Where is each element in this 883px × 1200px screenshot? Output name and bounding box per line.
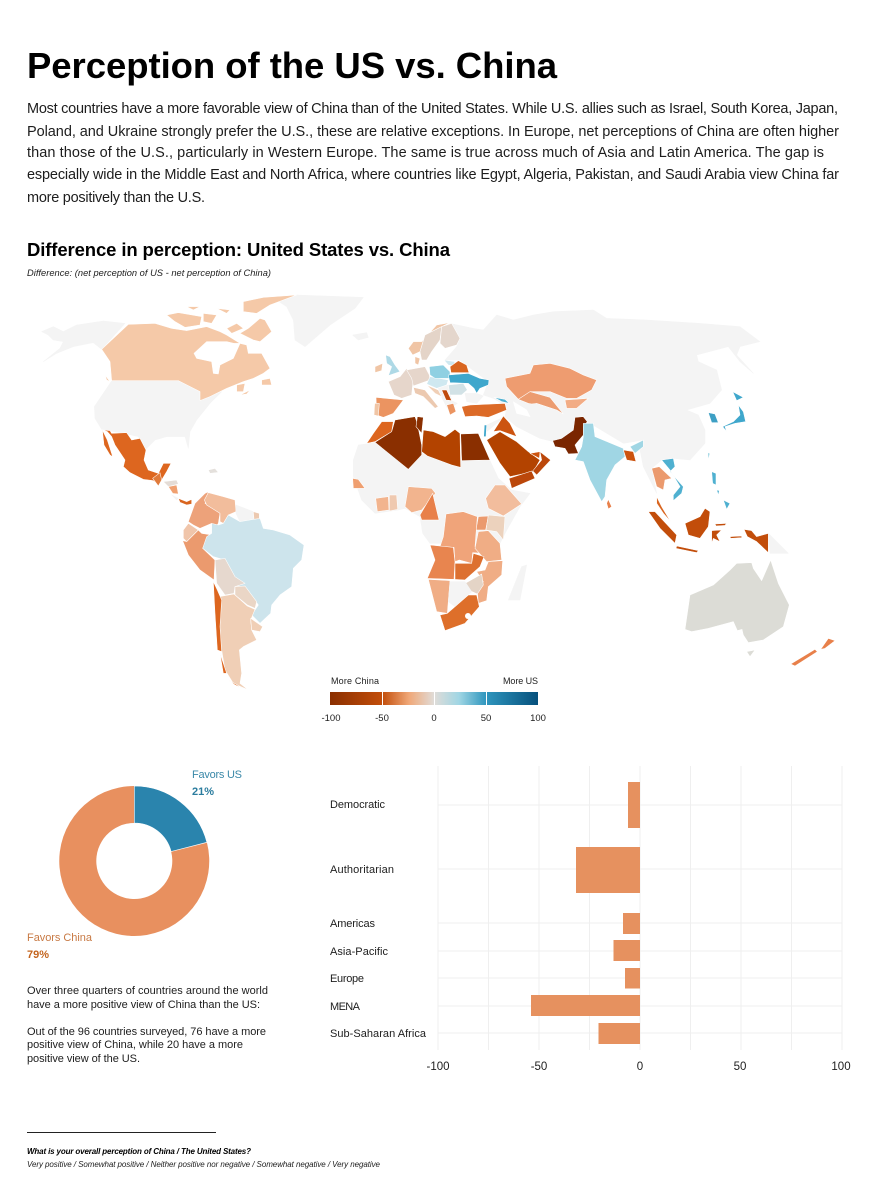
donut explanation text: have a more positive view of China than the US: bbox=[27, 999, 260, 1011]
map region: Europe and Central Asia bbox=[374, 310, 760, 493]
country: Morocco bbox=[367, 422, 393, 443]
intro text block: than those of the U.S., particularly in Western Europe. The same is true across much of Asia and Latin America. The gap is bbox=[27, 145, 824, 161]
map region: Oceania bbox=[685, 560, 835, 666]
bar axis labels: 0 bbox=[637, 1061, 643, 1073]
map legend: -100 bbox=[321, 713, 341, 724]
country: Italy bbox=[413, 387, 438, 408]
country: Brazil bbox=[203, 515, 304, 623]
bar category labels: MENA bbox=[330, 1001, 361, 1013]
intro text block bbox=[27, 101, 839, 206]
donut label: favors China bbox=[27, 932, 93, 961]
survey question footnote bbox=[27, 1147, 381, 1169]
bar category labels: Americas bbox=[330, 918, 376, 930]
country: Uruguay bbox=[251, 618, 263, 632]
world map bbox=[42, 295, 835, 690]
donut slice: favors China bbox=[59, 786, 209, 936]
country: Japan bbox=[723, 405, 746, 432]
country: Serbia bbox=[442, 390, 452, 401]
map region: North America bbox=[42, 295, 368, 505]
country: South Africa bbox=[440, 595, 479, 631]
country: Mozambique bbox=[477, 561, 503, 603]
donut label: favors US: Favors US bbox=[192, 769, 242, 781]
country: Mexico bbox=[102, 430, 171, 485]
country: United Kingdom bbox=[386, 355, 400, 376]
country: Ethiopia bbox=[486, 485, 522, 516]
map legend: More China bbox=[331, 676, 379, 686]
bar axis labels: 100 bbox=[831, 1061, 851, 1073]
country: Kazakhstan bbox=[505, 363, 597, 399]
country: Iraq bbox=[493, 416, 517, 437]
country: Algeria bbox=[375, 417, 422, 469]
donut label: favors China: 79% bbox=[27, 949, 49, 961]
country: Peru bbox=[183, 530, 215, 580]
country: Argentina bbox=[218, 594, 257, 690]
country: Colombia bbox=[188, 492, 220, 533]
map legend: 50 bbox=[481, 713, 491, 724]
country: Poland bbox=[429, 365, 450, 378]
country: Malaysia bbox=[657, 497, 671, 522]
donut explanation text: positive view of the US. bbox=[27, 1053, 140, 1065]
country: Yemen bbox=[509, 471, 535, 488]
bar category labels: Asia-Pacific bbox=[330, 946, 388, 958]
country: Egypt bbox=[461, 433, 490, 461]
country: Philippines bbox=[712, 472, 716, 485]
donut explanation text bbox=[27, 985, 268, 1065]
country: Thailand bbox=[652, 467, 672, 490]
map heading: Difference in perception: United States vs. China bbox=[27, 239, 451, 260]
bar chart bbox=[330, 766, 851, 1073]
country: Saudi Arabia bbox=[487, 432, 540, 477]
country: Tanzania bbox=[475, 531, 502, 562]
intro text block: especially wide in the Middle East and North Africa, where countries like Egypt, Algeria, Pakistan, and Saudi Arabia view China far bbox=[27, 167, 839, 183]
donut explanation text: Out of the 96 countries surveyed, 76 have a more bbox=[27, 1026, 266, 1038]
country: Turkey bbox=[462, 403, 507, 417]
bar category labels bbox=[330, 799, 427, 1040]
country: South Korea bbox=[708, 413, 718, 423]
country: DR Congo bbox=[440, 512, 483, 563]
country: Indonesia bbox=[648, 512, 677, 543]
country: Germany bbox=[407, 367, 430, 386]
country: Canada bbox=[102, 323, 270, 401]
map legend bbox=[321, 676, 546, 724]
country: Sweden bbox=[420, 327, 442, 360]
country: Pakistan bbox=[553, 417, 587, 454]
country: Nigeria bbox=[405, 487, 436, 513]
country: Ecuador bbox=[183, 523, 198, 542]
map legend: 0 bbox=[431, 713, 437, 724]
country: Zimbabwe bbox=[465, 574, 483, 594]
survey question footnote: What is your overall perception of China / The United States? bbox=[27, 1147, 251, 1156]
donut label: favors US bbox=[192, 769, 242, 798]
country: Vietnam bbox=[662, 458, 683, 501]
map subtitle: Difference: (net perception of US - net perception of China) bbox=[27, 268, 271, 278]
survey question footnote: Very positive / Somewhat positive / Neither positive nor negative / Somewhat negative / Very negative bbox=[27, 1160, 381, 1169]
country: Spain bbox=[376, 397, 403, 417]
bar category labels: Democratic bbox=[330, 799, 386, 811]
donut chart bbox=[59, 786, 209, 936]
intro text block: Most countries have a more favorable view of China than of the United States. While U.S. allies such as Israel, South Korea, Japan, bbox=[27, 101, 838, 117]
bar category labels: Europe bbox=[330, 973, 364, 985]
country: Venezuela bbox=[204, 493, 236, 523]
intro text block: more positively than the U.S. bbox=[27, 190, 205, 206]
country: Bangladesh bbox=[623, 450, 636, 462]
donut explanation text: Over three quarters of countries around the world bbox=[27, 985, 268, 997]
country: Namibia bbox=[428, 579, 450, 613]
map region: South and East Asia bbox=[575, 392, 788, 553]
country: Ukraine bbox=[448, 373, 489, 393]
map legend: More US bbox=[503, 676, 538, 686]
country: France bbox=[388, 368, 413, 398]
donut explanation text: positive view of China, while 20 have a more bbox=[27, 1039, 243, 1051]
country: Australia bbox=[685, 560, 789, 643]
country: New Zealand bbox=[791, 649, 817, 666]
map region: Africa and Middle East bbox=[353, 416, 551, 631]
country: Cameroon bbox=[420, 493, 439, 520]
country: Chile bbox=[213, 582, 222, 652]
country: Zambia bbox=[455, 553, 484, 580]
country: Angola bbox=[427, 545, 455, 579]
bar axis labels: 50 bbox=[734, 1061, 746, 1073]
country: India bbox=[575, 423, 625, 502]
donut label: favors China: Favors China bbox=[27, 932, 93, 944]
country: Bolivia bbox=[215, 558, 245, 595]
country: Romania bbox=[448, 383, 467, 395]
country: Guatemala bbox=[153, 473, 162, 486]
map region: South America bbox=[183, 492, 304, 690]
donut slice: favors US bbox=[134, 786, 207, 852]
country: Oman bbox=[533, 452, 551, 475]
intro text block: Poland, and Ukraine strongly prefer the U.S., these are relative exceptions. In Europe, net perceptions of China are often higher bbox=[27, 124, 839, 140]
bar axis labels: -100 bbox=[426, 1061, 450, 1073]
country: Libya bbox=[422, 429, 461, 467]
country: Belarus bbox=[450, 361, 469, 373]
bar axis labels bbox=[426, 1061, 851, 1073]
bar axis labels: -50 bbox=[531, 1061, 547, 1073]
country: Senegal bbox=[353, 478, 365, 488]
title: Perception of the US vs. China bbox=[27, 45, 558, 86]
bar category labels: Authoritarian bbox=[330, 864, 394, 876]
bar category labels: Sub-Saharan Africa bbox=[330, 1028, 427, 1040]
bars bbox=[531, 782, 640, 1044]
donut label: favors US: 21% bbox=[192, 786, 214, 798]
map legend: -50 bbox=[375, 713, 389, 724]
map legend: 100 bbox=[530, 713, 546, 724]
country: Paraguay bbox=[235, 586, 257, 608]
country: Norway bbox=[408, 323, 450, 355]
country: Finland bbox=[440, 323, 460, 348]
